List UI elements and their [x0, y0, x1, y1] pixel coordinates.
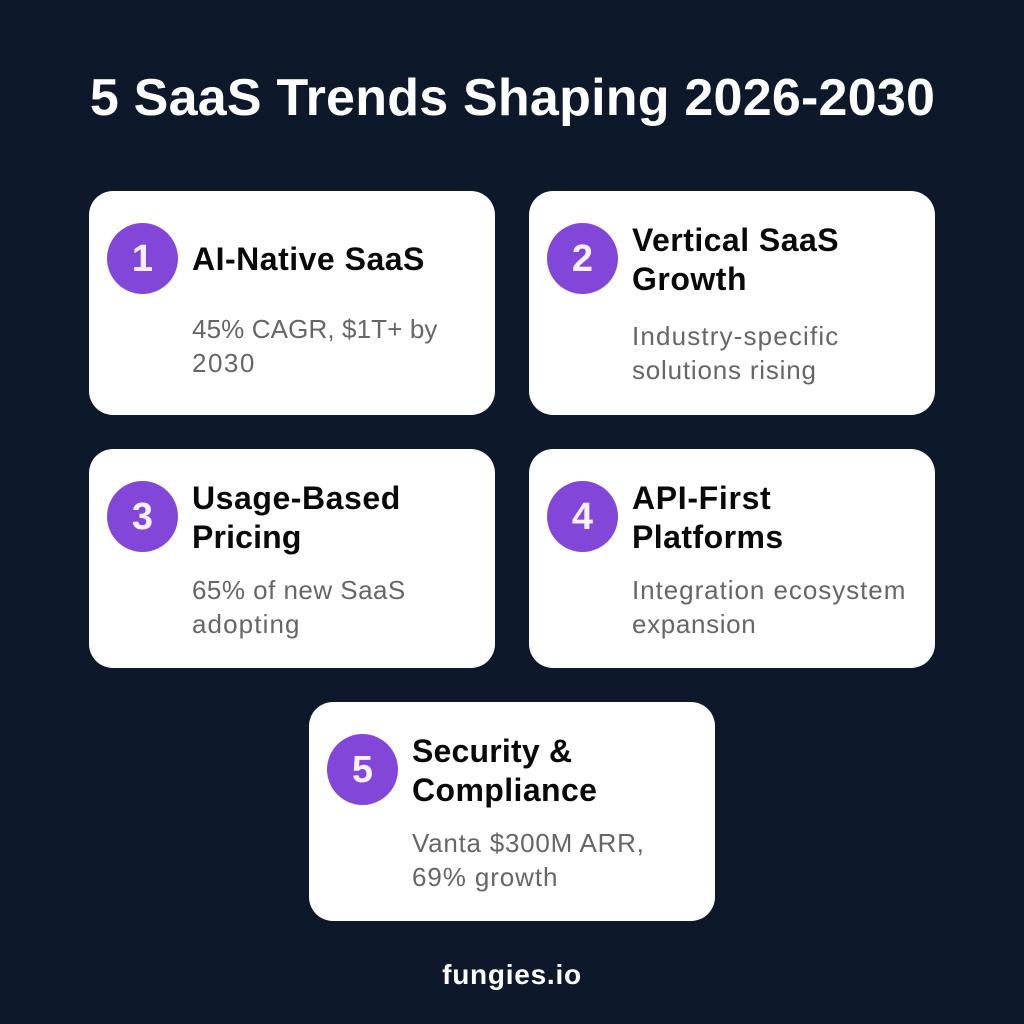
text: trend 5 description [412, 828, 645, 892]
text: trend 5 description: 69% growth [412, 862, 558, 892]
icon: number 2 [547, 223, 618, 294]
heading: API-First Platforms [632, 480, 784, 555]
text: trend 4 description [632, 575, 906, 639]
text: trend 1 description: 2030 [192, 348, 256, 378]
icon: number 5 [327, 734, 398, 805]
icon: number 5: 5 [352, 749, 373, 791]
heading: Usage-Based Pricing: Pricing [192, 519, 302, 555]
text: trend 4 description: Integration ecosystem [632, 575, 906, 605]
heading: AI-Native SaaS: AI-Native SaaS [192, 241, 425, 277]
heading: Security & Compliance: Security & [412, 733, 572, 769]
icon: number 4: 4 [572, 496, 593, 538]
heading: Vertical SaaS Growth: Growth [632, 261, 747, 297]
text: trend 5 description: Vanta $300M ARR, [412, 828, 645, 858]
text: trend 4 description: expansion [632, 609, 756, 639]
icon: number 4 [547, 481, 618, 552]
heading: API-First Platforms: API-First [632, 480, 771, 516]
icon: number 2: 2 [572, 238, 593, 280]
heading: API-First Platforms: Platforms [632, 519, 784, 555]
footer brand: fungies.io [442, 959, 582, 990]
text: trend 2 description [632, 321, 839, 385]
panel: trend 2 [529, 191, 935, 415]
text: trend 3 description: adopting [192, 609, 301, 639]
heading: Security & Compliance: Compliance [412, 772, 597, 808]
panel: trend 3 [89, 449, 495, 668]
heading: Vertical SaaS Growth [632, 222, 839, 297]
text: trend 3 description: 65% of new SaaS [192, 575, 406, 605]
heading: Usage-Based Pricing: Usage-Based [192, 480, 401, 516]
icon: number 1 [107, 223, 178, 294]
panel: trend 1 [89, 191, 495, 415]
icon: number 1: 1 [132, 238, 153, 280]
heading: Security & Compliance [412, 733, 597, 808]
text: trend 2 description: Industry-specific [632, 321, 839, 351]
text: trend 2 description: solutions rising [632, 355, 817, 385]
panel: trend 4 [529, 449, 935, 668]
heading: Usage-Based Pricing [192, 480, 401, 555]
text: trend 1 description: 45% CAGR, $1T+ by [192, 314, 438, 344]
icon: number 3 [107, 481, 178, 552]
panel: trend 5 [309, 702, 715, 921]
icon: number 3: 3 [132, 496, 153, 538]
text: trend 3 description [192, 575, 406, 639]
text: trend 1 description [192, 314, 438, 378]
title: 5 SaaS Trends Shaping 2026-2030 [90, 69, 935, 127]
heading: Vertical SaaS Growth: Vertical SaaS [632, 222, 839, 258]
